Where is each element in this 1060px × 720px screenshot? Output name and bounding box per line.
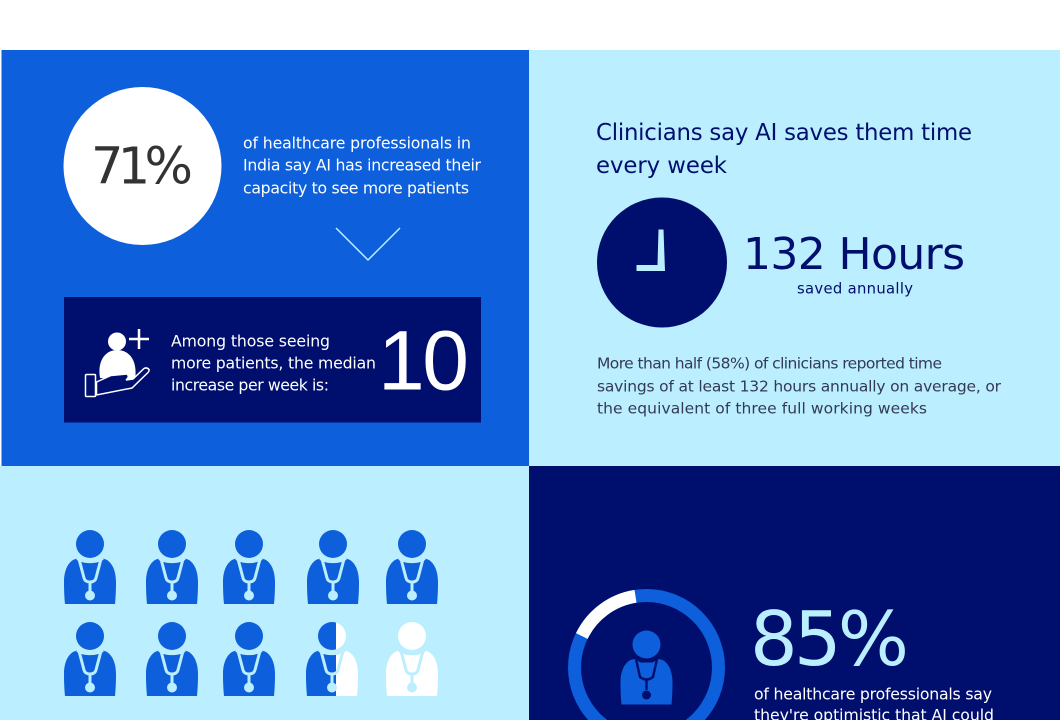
stat circle: 71% [64, 87, 222, 245]
chart: 85% ring [574, 596, 718, 720]
arrow: chevron down [336, 228, 400, 260]
text: median label: increase per week is: [171, 376, 329, 394]
text: capacity statement: India say AI has increased their [243, 156, 482, 174]
heading: time savings: every week [596, 153, 728, 179]
heading: time savings [596, 120, 972, 179]
panel: time savings [529, 50, 1060, 466]
text: capacity statement [243, 134, 482, 198]
icon: doctor [620, 630, 672, 704]
stat: 85%: 85% [750, 595, 909, 683]
panel: optimism [529, 466, 1060, 720]
text: optimism statement [754, 684, 994, 720]
icon: clock [597, 198, 727, 328]
icon: patient in hand with plus [86, 329, 149, 396]
stat circle: 71%: 71% [91, 138, 193, 196]
text: time savings detail: More than half (58%) of clinicians reported time [597, 354, 942, 372]
text: optimism statement: of healthcare professionals say [754, 684, 992, 704]
stat: 10: 10 [378, 314, 469, 408]
text: median label [171, 332, 376, 394]
label: saved annually: saved annually [797, 280, 913, 298]
stat: 132 hours: 132 Hours [743, 229, 965, 280]
pictogram: row 1 doctors [64, 530, 438, 604]
callout: median increase [64, 297, 481, 422]
text: median label: more patients, the median [171, 354, 376, 372]
heading: time savings: Clinicians say AI saves them time [596, 120, 972, 146]
text: capacity statement: capacity to see more patients [243, 178, 469, 198]
text: capacity statement: of healthcare professionals in [243, 134, 471, 152]
panel: doctors pictogram [0, 466, 529, 720]
pictogram: row 2 doctors [64, 622, 438, 696]
text: median label: Among those seeing [171, 332, 330, 350]
panel: patient capacity [2, 50, 529, 466]
text: time savings detail: savings of at least 132 hours annually on average, or [597, 378, 1002, 396]
text: time savings detail: the equivalent of three full working weeks [597, 400, 927, 418]
text: time savings detail [597, 354, 1002, 418]
